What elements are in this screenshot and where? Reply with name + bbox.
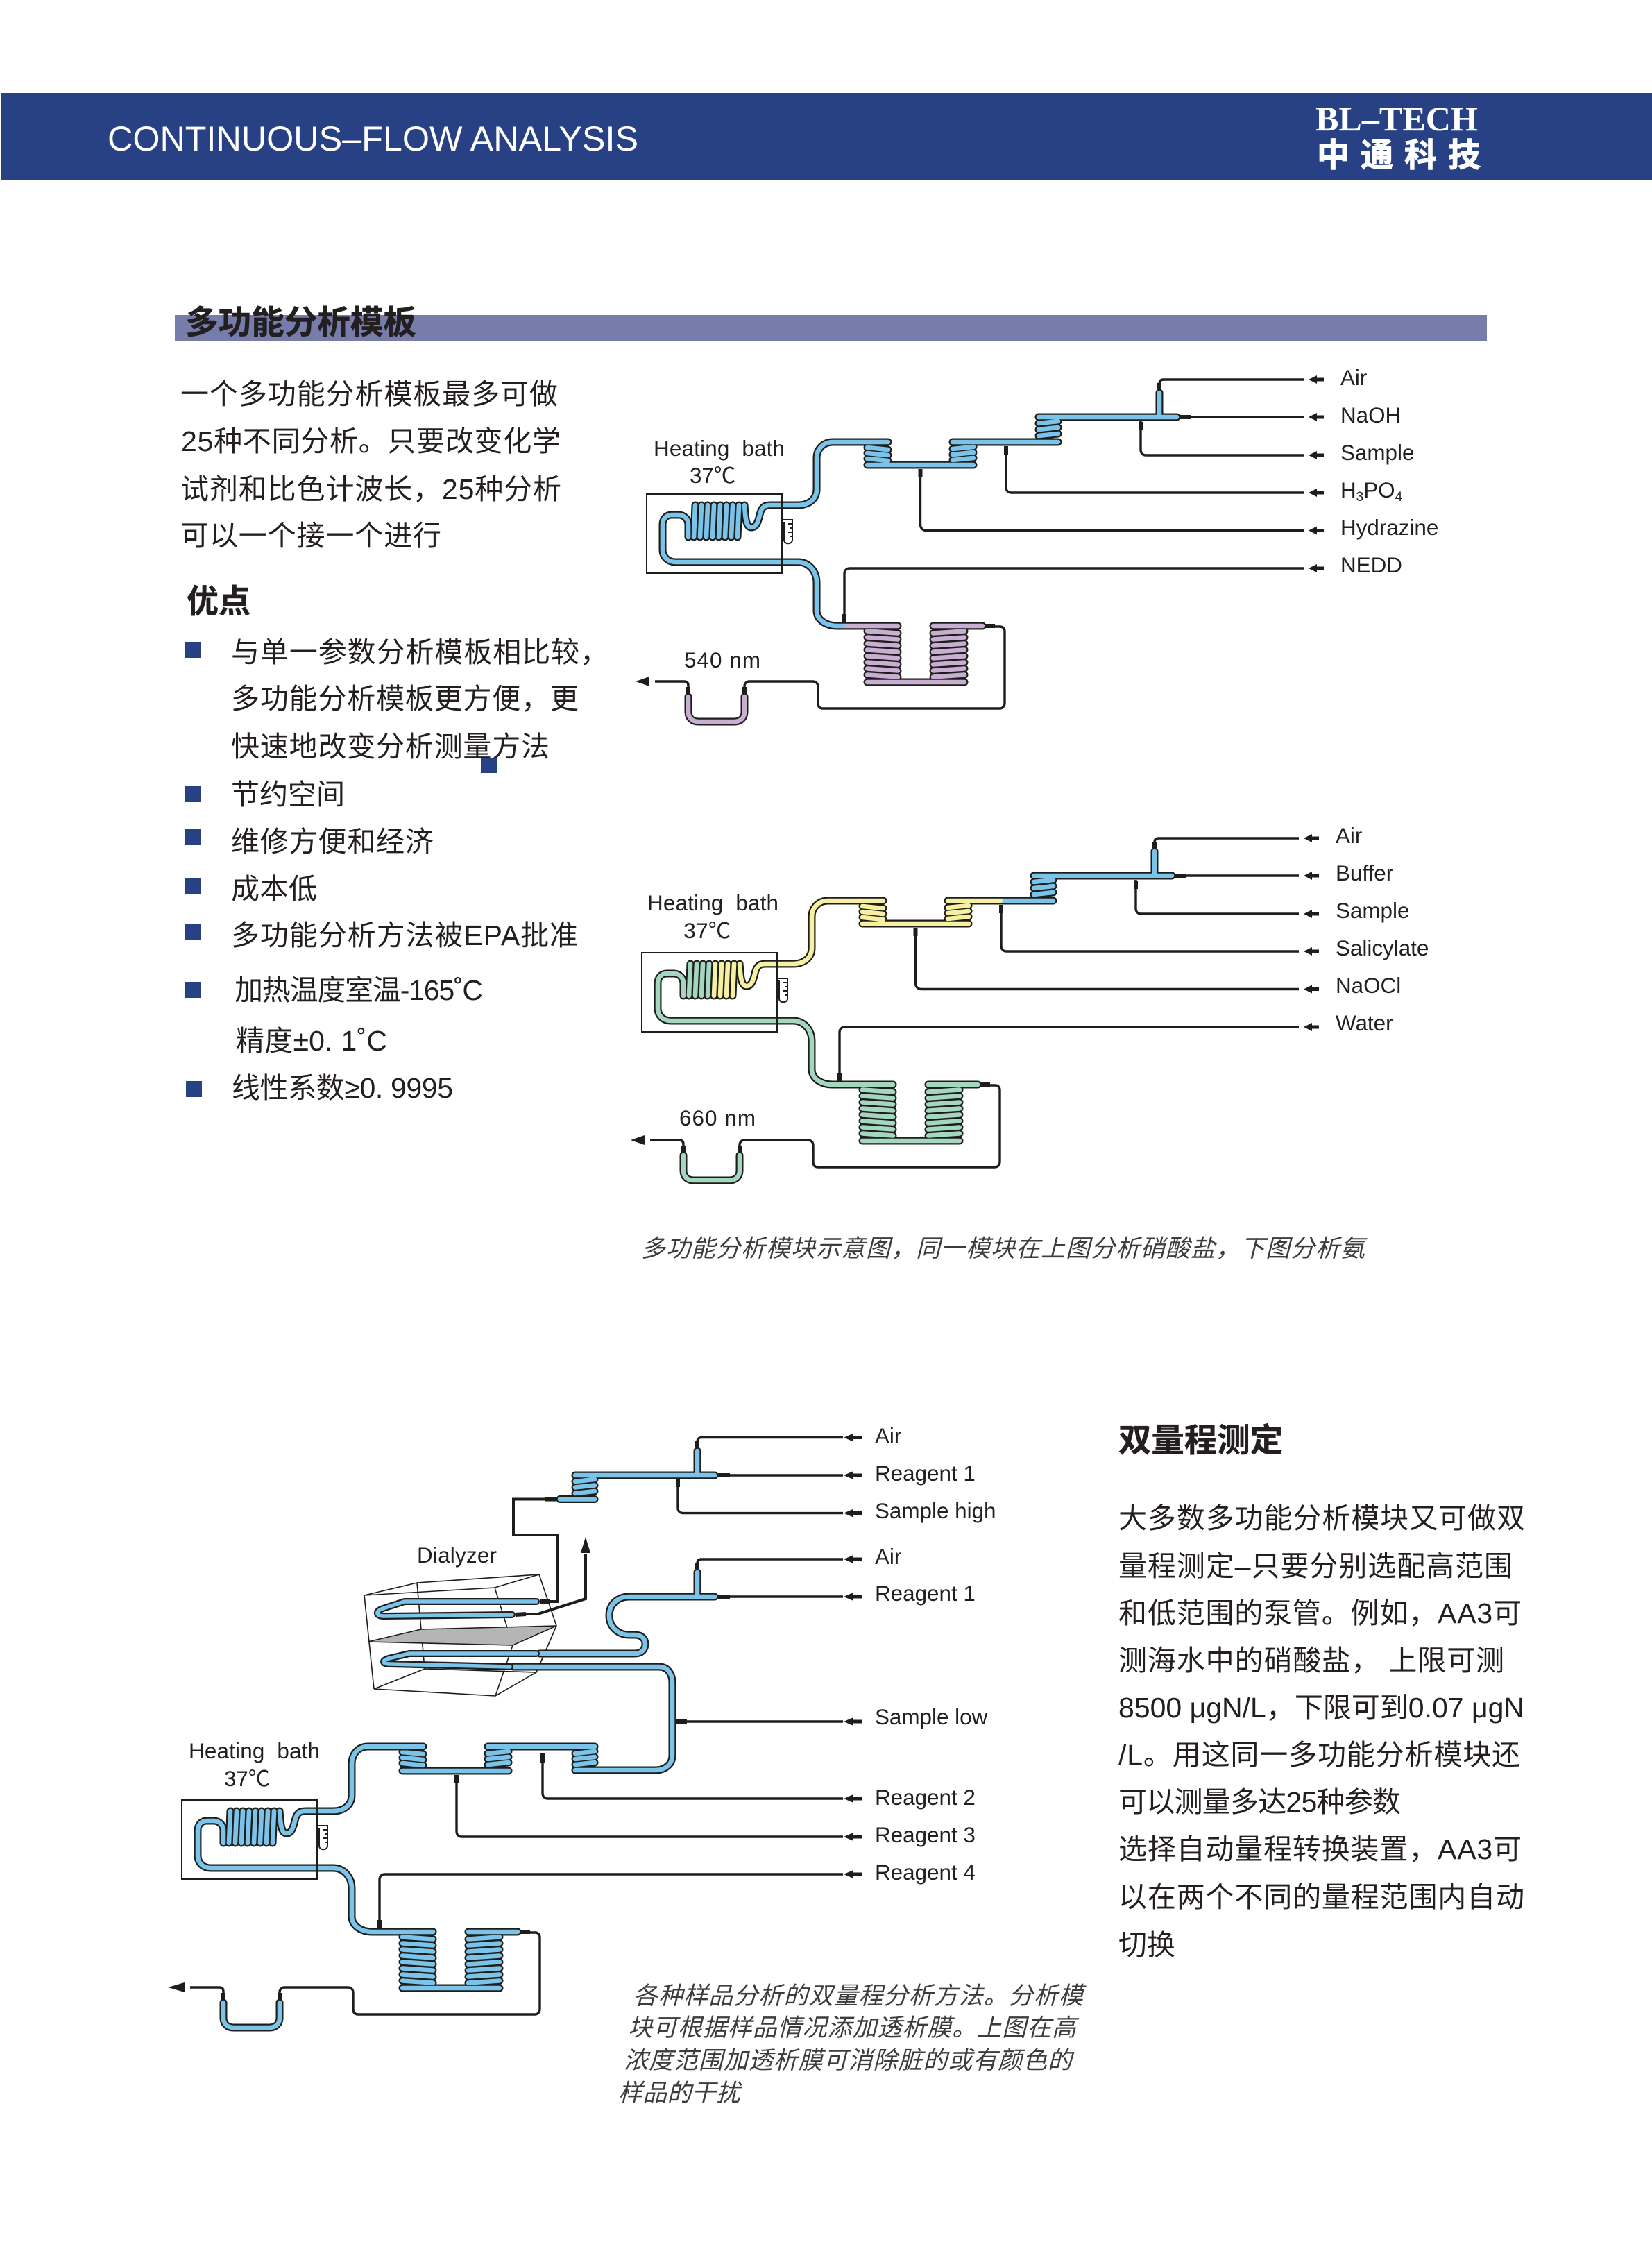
input labels: Salicylate <box>1336 936 1429 960</box>
input labels: Air <box>1340 366 1367 390</box>
heating bath box <box>647 494 782 573</box>
output arrow <box>168 1982 185 1992</box>
input arrows <box>844 1434 862 1878</box>
dialyzer tubes blue fill <box>377 1602 536 1667</box>
lower tubes black outline <box>198 1747 518 2028</box>
diagram: ammonia manifold <box>631 824 1429 1180</box>
heating bath label: 37℃ <box>690 464 735 488</box>
input labels: Air <box>875 1545 901 1569</box>
caption: dual range: 浓度范围加透析膜可消除脏的或有颜色的 <box>624 2047 1075 2074</box>
outer tubes blue fill <box>402 1451 715 1771</box>
diagram: nitrate manifold <box>636 366 1438 722</box>
input labels <box>875 1424 996 1885</box>
tube connectors <box>683 842 1186 1153</box>
input labels: NEDD <box>1340 553 1402 577</box>
input labels: Sample <box>1336 899 1409 923</box>
purple tube fill <box>688 626 982 722</box>
feed lines <box>650 838 1299 1167</box>
advantages list: 加热温度室温-165˚C <box>235 974 483 1006</box>
caption: manifold diagrams: 多功能分析模块示意图，同一模块在上图分析硝酸盐，下图分析氨 <box>641 1235 1368 1262</box>
intro paragraph: 试剂和比色计波长，25种分析 <box>180 473 561 505</box>
advantages list: 多功能分析模板更方便，更 <box>231 683 579 715</box>
dialyzer box frame <box>364 1574 556 1696</box>
thermometer icon <box>318 1826 327 1849</box>
input labels <box>1340 366 1438 577</box>
input labels <box>1336 824 1429 1035</box>
dialyzer tubes black outline <box>377 1602 536 1667</box>
dual range paragraph: 可以测量多达25种参数 <box>1118 1786 1401 1818</box>
input labels: Sample low <box>875 1705 988 1729</box>
wavelength label: 660 nm <box>679 1106 756 1130</box>
blue tube fill <box>1000 851 1172 901</box>
input labels: Water <box>1336 1011 1393 1035</box>
input labels: Sample high <box>875 1499 996 1523</box>
section heading bar: 多功能分析模板 <box>185 304 416 341</box>
output arrow <box>631 1135 645 1145</box>
feed lines <box>380 1438 843 1928</box>
input arrows <box>1304 834 1319 1031</box>
section heading: dual range: 双量程测定 <box>1118 1422 1283 1459</box>
heating bath box <box>182 1800 317 1879</box>
input labels: PO <box>1363 478 1395 502</box>
heating bath label <box>647 891 778 943</box>
advantages list: 精度±0. 1˚C <box>236 1025 387 1057</box>
dual range paragraph: 以在两个不同的量程范围内自动 <box>1118 1881 1524 1913</box>
input labels: NaOH <box>1340 403 1401 427</box>
input labels: NaOCl <box>1336 974 1401 998</box>
yellow tube fill <box>714 901 1000 996</box>
intro paragraph: 25种不同分析。只要改变化学 <box>181 425 561 457</box>
dialyzer label: Dialyzer <box>417 1543 497 1568</box>
input labels: Reagent 3 <box>875 1823 976 1847</box>
input labels: Sample <box>1340 441 1414 465</box>
dual range paragraph: 选择自动量程转换装置，AA3可 <box>1118 1833 1522 1865</box>
arrow: dialyzer outlet <box>581 1537 590 1553</box>
advantages list: 与单一参数分析模板相比较， <box>231 636 608 668</box>
advantages list: 节约空间 <box>231 779 345 810</box>
logo: 中通科技 <box>1317 137 1481 173</box>
section heading bar <box>175 304 1487 341</box>
lower tubes blue fill <box>198 1747 518 2028</box>
logo <box>1315 99 1481 173</box>
input labels: H <box>1340 478 1356 502</box>
logo: BL–TECH <box>1315 99 1478 138</box>
tube connectors <box>688 383 1191 694</box>
advantages list: 快速地改变分析测量方法 <box>231 731 550 763</box>
heating bath label: 37℃ <box>683 919 731 943</box>
advantages heading: 优点 <box>187 583 250 620</box>
caption: dual range: 各种样品分析的双量程分析方法。分析模 <box>633 1982 1087 2010</box>
heating bath label <box>189 1739 320 1791</box>
green tube fill <box>658 964 978 1180</box>
input labels: Reagent 1 <box>875 1461 976 1486</box>
intro paragraph: 可以一个接一个进行 <box>180 520 441 552</box>
outlet lines <box>190 1933 540 2014</box>
dual range paragraph: 测海水中的硝酸盐， 上限可测 <box>1118 1645 1504 1676</box>
heating bath label: 37℃ <box>224 1767 270 1791</box>
dual range paragraph: 8500 μgN/L，下限可到0.07 μgN <box>1118 1692 1524 1724</box>
input labels: Buffer <box>1336 861 1393 885</box>
advantages list <box>185 636 608 1104</box>
blue tube fill <box>663 393 1177 626</box>
lower manifold section <box>168 1747 540 2028</box>
dual range paragraph: 和低范围的泵管。例如，AA3可 <box>1118 1597 1522 1629</box>
dual range paragraph <box>1118 1502 1525 1961</box>
input arrows <box>1309 375 1324 572</box>
tube black outline <box>658 851 1172 1180</box>
heating bath label <box>654 436 785 488</box>
advantages list: 成本低 <box>231 873 317 905</box>
input labels: Reagent 4 <box>875 1860 976 1885</box>
tube connectors <box>380 1441 730 1928</box>
feed lines <box>655 380 1304 708</box>
intro paragraph: 一个多功能分析模板最多可做 <box>180 378 558 410</box>
output arrow <box>636 677 649 686</box>
header title: CONTINUOUS–FLOW ANALYSIS <box>108 119 638 158</box>
dual range paragraph: 切换 <box>1118 1929 1175 1961</box>
thermometer icon <box>783 520 792 543</box>
caption: dual range: 块可根据样品情况添加透析膜。上图在高 <box>628 2014 1080 2041</box>
input labels: 4 <box>1395 490 1403 504</box>
caption: dual range <box>618 1982 1087 2107</box>
input labels: Air <box>1336 824 1362 848</box>
heating bath label: Heating bath <box>189 1739 320 1763</box>
dual range paragraph: 量程测定–只要分别选配高范围 <box>1118 1550 1513 1582</box>
diagram: dual range manifold <box>168 1424 996 2028</box>
dialyzer link lines <box>513 1499 586 1614</box>
dual range paragraph: 大多数多功能分析模块又可做双 <box>1118 1502 1525 1534</box>
dialyzer membrane <box>368 1626 556 1645</box>
advantages list: 多功能分析方法被EPA批准 <box>231 919 578 951</box>
dual range paragraph: /L。用这同一多功能分析模块还 <box>1118 1739 1520 1771</box>
input labels: Air <box>875 1424 901 1448</box>
input labels: Reagent 2 <box>875 1785 976 1810</box>
caption: dual range: 样品的干扰 <box>618 2080 743 2107</box>
heating bath label: Heating bath <box>654 436 785 461</box>
header band <box>1 93 1652 180</box>
outlet connectors <box>223 1932 530 2000</box>
wavelength label: 540 nm <box>684 648 760 672</box>
input labels: 3 <box>1356 490 1363 504</box>
intro paragraph <box>180 378 561 552</box>
heating bath label: Heating bath <box>647 891 778 915</box>
input labels: Reagent 1 <box>875 1581 976 1606</box>
tube black outline <box>663 393 1177 722</box>
thermometer icon <box>778 978 787 1002</box>
advantages list: 维修方便和经济 <box>231 826 434 858</box>
advantages list: 线性系数≥0. 9995 <box>232 1072 453 1104</box>
heating bath box <box>642 953 777 1032</box>
outer tubes black outline <box>402 1451 715 1771</box>
input labels: Hydrazine <box>1340 516 1438 540</box>
